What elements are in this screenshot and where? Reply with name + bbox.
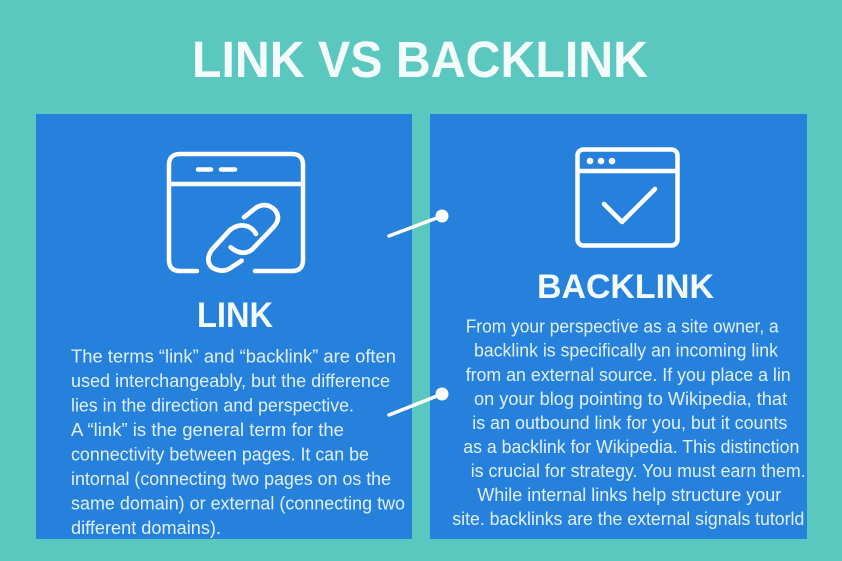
text block: backlink description: on your blog pointing to Wikipedia, that [474,389,787,409]
icon: browser window with chain link [169,154,303,271]
panel: backlink [430,114,807,539]
text block: link description: lies in the direction and perspective. [71,396,354,416]
text block: backlink description: backlink is specifically an incoming link [474,341,779,361]
text block: link description: A “link” is the general term for the [71,420,344,440]
text block: link description: intornal (connecting two pages on os the [71,469,391,489]
panel: link [36,114,412,539]
text block: link description: connectivity between pages. It can be [71,444,369,464]
heading: backlink: BACKLINK [537,268,714,306]
title: LINK VS BACKLINK [192,31,648,88]
text block: backlink description: From your perspective as a site owner, a [466,317,780,337]
text block: backlink description [452,317,806,529]
text block: backlink description: from an external source. If you place a lin [466,365,791,385]
text block: backlink description: While internal links help structure your [477,485,781,505]
text block: link description: different domains). [71,518,221,538]
connector: bottom arrow [389,388,448,415]
connector: top arrow [389,210,448,236]
text block: link description: same domain) or external (connecting two [71,494,405,514]
heading: link: LINK [197,296,273,335]
text block: backlink description: is an outbound link for you, but it counts [472,413,787,433]
text block: link description [71,346,405,538]
icon: browser window with check mark [578,150,678,246]
text block: backlink description: as a backlink for Wikipedia. This distinction [463,437,799,457]
text block: link description: used interchangeably, but the difference [71,371,390,391]
text block: backlink description: is crucial for strategy. You must earn them. [471,461,806,481]
text block: link description: The terms “link” and “backlink” are often [71,346,396,366]
text block: backlink description: site. backlinks are the external signals tutorld [452,509,804,529]
